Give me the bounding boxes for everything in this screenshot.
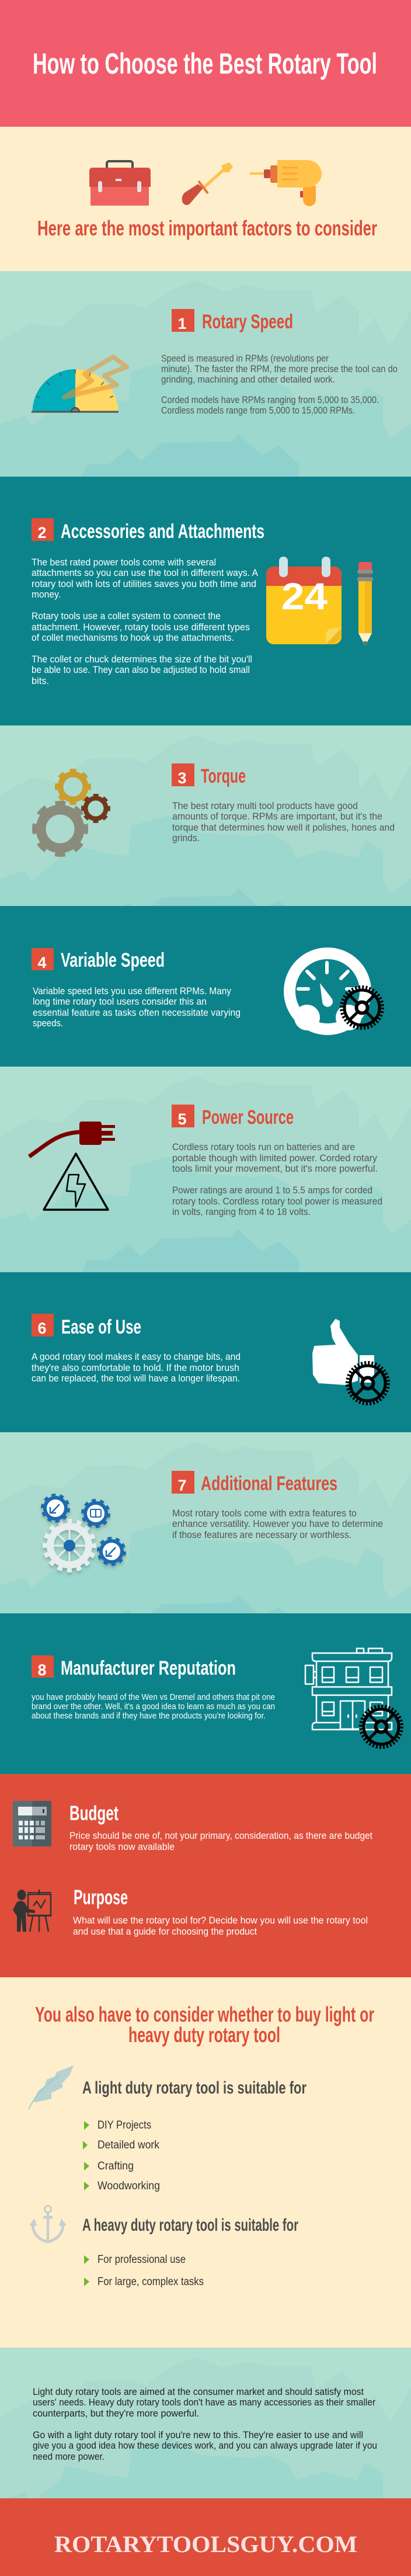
text: ease of use body [32,1351,241,1384]
icon: calendar [266,557,342,644]
text: torque body: grinds. [172,832,200,843]
text: accessories body: attachments so you can use the tool in different ways. A [32,567,259,578]
text: accessories body [32,557,259,686]
text: torque body: torque that determines how well it polishes, hones and [172,822,395,833]
icon: drill [250,160,322,206]
text: power source body: rotary tools. Cordless rotary tool power is measured [172,1196,382,1207]
text: rotary speed body: Cordless models range from 5,000 to 15,000 RPMs. [161,405,355,416]
text: closing advice [33,2386,377,2462]
text: accessories body: bits. [32,675,49,686]
text: purpose body: What will use the rotary tool for? Decide how you will use the rotary tool [73,1915,368,1926]
text: torque body [172,800,395,843]
text: rotary speed body: Corded models have RPMs ranging from 5,000 to 35,000. [161,394,379,405]
heading: budget: Budget [69,1802,119,1825]
panel: 3 torque [0,725,411,931]
badge 1 [172,309,194,332]
icon: pencil [357,562,373,646]
badge 4 [32,948,54,971]
text: purpose body [73,1915,368,1937]
list: light duty uses: Crafting [97,2160,134,2172]
icon: building with gear [305,1648,402,1747]
text: power source body: tools limit your movement, but it's more powerful. [172,1163,378,1174]
icon: speed gauge [32,357,127,412]
badge 3: 3 [177,769,187,787]
text: accessories body: Rotary tools use a collet system to connect the [32,610,221,622]
text: additional features body: enhance versatility. However you have to determine [172,1518,383,1529]
text: power source body: Power ratings are around 1 to 5.5 amps for corded [172,1185,372,1196]
text: closing advice: users' needs. Heavy duty rotary tools don't have as many accessories as their smaller [33,2397,375,2408]
badge 8: 8 [37,1661,47,1679]
badge 5: 5 [177,1110,187,1128]
text: manufacturer reputation body: you have probably heard of the Wen vs Dremel and others that pit one [32,1692,275,1702]
panel: intro [0,127,411,271]
list: heavy duty uses: For professional use [97,2254,186,2266]
badge 2 [32,518,54,541]
list: heavy duty uses [84,2254,204,2288]
text: accessories body: The best rated power tools come with several [32,557,216,568]
badge 2: 2 [37,524,47,541]
text: closing advice: Go with a light duty rotary tool if you're new to this. They're easier to use and will [33,2429,363,2440]
badge 3 [172,763,194,787]
text: rotary speed body [161,353,398,416]
text: power source body: portable though with limited power. Corded rotary [172,1152,377,1164]
text: ease of use body: A good rotary tool makes it easy to change bits, and [32,1351,241,1362]
list: light duty uses: DIY Projects [97,2119,151,2131]
text: budget body [69,1830,372,1852]
badge 8 [32,1655,54,1679]
text: ease of use body: they're also comfortable to hold. If the motor brush [32,1362,239,1373]
panel: 2 accessories and attachments [0,477,411,725]
panel: light or heavy duty [0,1977,411,2348]
icon: speedometer with gear [284,947,382,1035]
text: variable speed body: essential feature as tasks often necessitate varying [33,1007,241,1018]
text: closing advice: Light duty rotary tools are aimed at the consumer market and should satisfy most [33,2386,364,2397]
text: manufacturer reputation body: brand over the other. Well, it's a good idea to learn as much as you can [32,1702,275,1711]
badge 7 [172,1471,194,1494]
text: accessories body: of collet mechanisms to hook up the attachments. [32,632,234,643]
panel: 7 additional features [0,1432,411,1638]
text: additional features body: Most rotary tools come with extra features to [172,1508,357,1519]
text: rotary speed body: grinding, machining and other detailed work. [161,374,335,385]
badge 7: 7 [177,1477,187,1494]
text: manufacturer reputation body: about these brands and if they have the products you're looking for. [32,1711,266,1721]
text: manufacturer reputation body [32,1692,275,1721]
text: additional features body: if those features are necessary or worthless. [172,1529,351,1540]
icon: electric hazard triangle [44,1154,108,1210]
text: purpose body: and use that a guide for choosing the product [73,1926,257,1937]
panel: closing advice [0,2348,411,2553]
heading: power source: Power Source [202,1106,294,1129]
badge 6: 6 [37,1320,47,1337]
text: budget body: rotary tools now available [69,1841,175,1852]
text: variable speed body: long time rotary tool users consider this an [33,996,207,1007]
panel: 1 rotary speed [0,271,411,477]
text: torque body: The best rotary multi tool products have good [172,800,358,811]
icon: calendar: 24 [281,575,328,617]
panel: 6 ease of use [0,1272,411,1432]
icon: calculator [13,1801,51,1846]
icon: power plug [29,1122,115,1157]
text: ease of use body: can be replaced, the tool will have a longer lifespan. [32,1373,240,1384]
footer brand: ROTARYTOOLSGUY.COM [54,2531,357,2557]
icon: feature gears [42,1495,125,1570]
heading: light or heavy duty [35,2002,374,2047]
subheading: light duty: A light duty rotary tool is suitable for [82,2078,306,2098]
panel: 8 manufacturer reputation [0,1613,411,1774]
icon: screwdriver [182,162,233,205]
list: light duty uses [83,2119,160,2192]
icon: thumbs up with gear [313,1320,388,1404]
panel: 4 variable speed [0,906,411,1067]
heading: purpose: Purpose [74,1886,128,1909]
text: torque body: amounts of torque. RPMs are important, but it's the [172,811,382,822]
text: variable speed body: speeds. [33,1018,63,1029]
text: accessories body: money. [32,589,61,600]
panel: 5 power source [0,1067,411,1272]
heading: ease of use: Ease of Use [61,1316,141,1338]
icon: toolbox [89,161,151,206]
panel: footer [0,2498,411,2576]
text: closing advice: give you a good idea how these devices work, and you can always upgrade later if you [33,2440,377,2451]
icon: presenter at chart [13,1890,51,1932]
badge 4: 4 [37,954,47,971]
badge 6 [32,1314,54,1337]
text: closing advice: counterparts, but they're more powerful. [33,2408,199,2419]
panel: budget and purpose [0,1774,411,1977]
list: heavy duty uses: For large, complex tasks [97,2276,204,2288]
panel: title banner [0,0,411,127]
heading: light or heavy duty: heavy duty rotary tool [128,2023,280,2047]
heading: accessories: Accessories and Attachments [61,520,264,543]
icon: gears [34,770,109,855]
badge 5 [172,1105,194,1128]
text: accessories body: rotary tool with lots of utilities saves you both time and [32,578,256,589]
text: accessories body: The collet or chuck determines the size of the bit you'll [32,654,252,665]
icon: anchor [29,2206,67,2242]
heading: manufacturer reputation: Manufacturer Reputation [61,1657,236,1679]
heading: additional features: Additional Features [201,1473,337,1495]
text: power source body: Cordless rotary tools run on batteries and are [172,1141,355,1152]
text: power source body: in volts, ranging from 4 to 18 volts. [172,1206,311,1217]
badge 1: 1 [177,315,187,332]
list: light duty uses: Detailed work [97,2139,159,2151]
heading: rotary speed: Rotary Speed [202,311,293,333]
text: variable speed body [33,985,241,1029]
text: closing advice: need more power. [33,2451,105,2462]
text: variable speed body: Variable speed lets you use different RPMs. Many [33,985,231,997]
text: accessories body: attachment. However, rotary tools use different types [32,622,250,633]
icon: feather [29,2065,74,2109]
text: budget body: Price should be one of, not your primary, consideration, as there are budget [69,1830,372,1841]
heading: torque: Torque [201,765,246,787]
text: additional features body [172,1508,383,1540]
text: accessories body: be able to use. They can also be adjusted to hold small [32,664,250,675]
heading: variable speed: Variable Speed [61,949,165,971]
text: power source body [172,1141,382,1217]
text: rotary speed body: Speed is measured in RPMs (revolutions per [161,353,329,364]
subheading: heavy duty: A heavy duty rotary tool is suitable for [82,2216,298,2235]
list: light duty uses: Woodworking [97,2180,160,2192]
